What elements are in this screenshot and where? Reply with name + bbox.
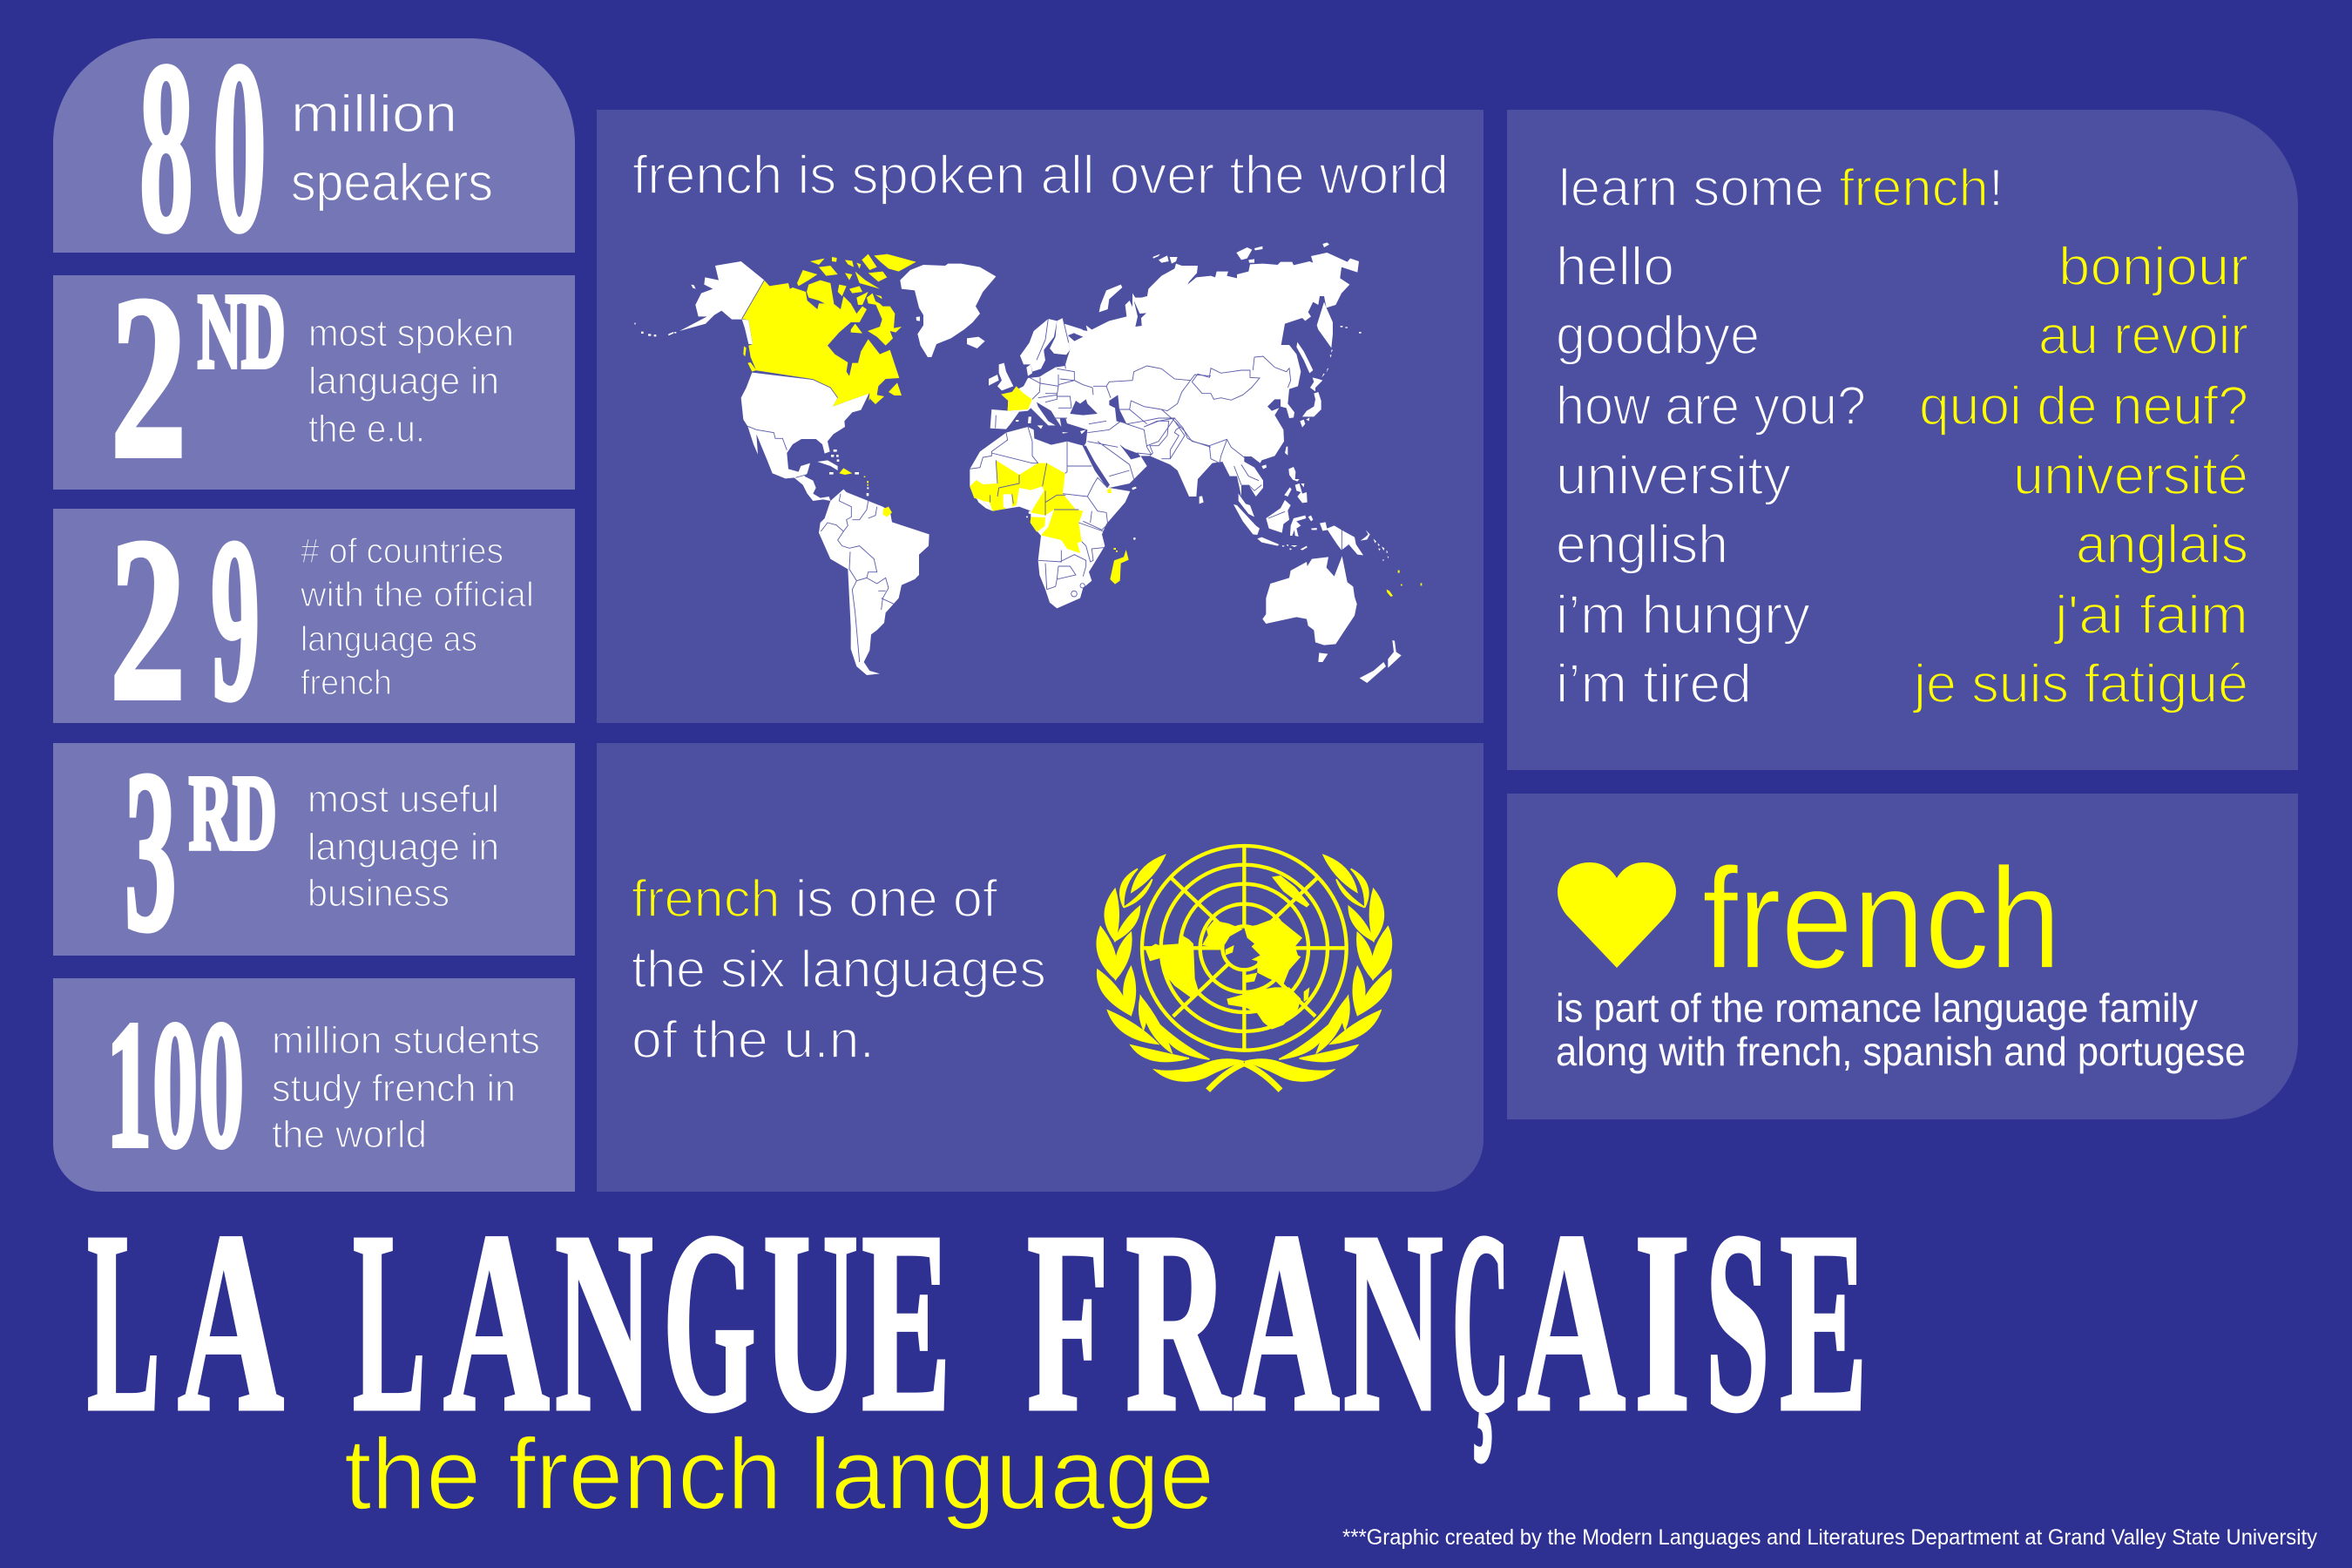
- title: la langue française: G: [663, 1179, 756, 1465]
- heading: learn some french: learn some french!: [1558, 159, 2004, 217]
- stat text: million students study french in the world: the world: [272, 1113, 427, 1156]
- stat number: 80: 80: [139, 11, 267, 282]
- phrase list: english: hello: [1556, 237, 1674, 297]
- phrase list: english: i’m tired: [1556, 654, 1752, 714]
- stat number: 29: [110, 490, 260, 748]
- panel: romance language: [1507, 794, 2298, 1119]
- map country borders: [742, 280, 1342, 662]
- stat text: most useful language in business: business: [308, 872, 449, 915]
- heading: french is spoken all over the world: french is spoken all over the world: [632, 145, 1449, 206]
- title: la langue française: L: [87, 1179, 160, 1465]
- title: la langue française: L: [353, 1179, 426, 1465]
- stat number: 3rd: RD: [189, 755, 276, 872]
- phrase list: english: [1556, 237, 1866, 714]
- icon: UN emblem: [1097, 846, 1391, 1091]
- phrase list: french: quoi de neuf?: [1919, 376, 2248, 436]
- title: la langue française: N: [555, 1179, 653, 1465]
- stat text: most useful language in business: language in: [308, 826, 499, 868]
- map land: asia east: [1132, 242, 1362, 497]
- phrase list: french: j'ai faim: [2053, 585, 2248, 645]
- title: la langue française: A: [1517, 1179, 1625, 1465]
- stat text: most spoken language in the e.u.: the e.u.: [308, 408, 425, 450]
- map inland seas: [1044, 301, 1146, 488]
- title: la langue française: N: [1343, 1179, 1443, 1465]
- title: la langue française: U: [763, 1179, 858, 1465]
- title: la langue française: S: [1706, 1179, 1769, 1465]
- title: la langue française: A: [1233, 1179, 1340, 1465]
- title: la langue française: A: [443, 1179, 550, 1465]
- text: french is one of the six languages of the u.n.: of the u.n.: [632, 1010, 875, 1069]
- phrase list: french: anglais: [2076, 515, 2248, 575]
- panel: 2nd most spoken: [53, 248, 575, 506]
- text: romance language family: [1556, 985, 2246, 1074]
- stat text: number of countries: with the official: [300, 576, 534, 614]
- stat number: 2nd: [111, 248, 285, 506]
- phrase list: french: bonjour: [2058, 237, 2248, 297]
- emblem continents: [1146, 875, 1309, 1030]
- emblem globe rings: [1142, 846, 1347, 1051]
- stat text: number of countries: language as: [301, 620, 477, 659]
- stat text: most useful language in business: [308, 778, 499, 915]
- stat text: million students study french in the world: million students: [272, 1019, 540, 1062]
- text: romance language family: is part of the romance language family: [1556, 985, 2198, 1031]
- stat number: 2nd: 2: [111, 248, 186, 506]
- text: romance language family: along with french, spanish and portugese: [1556, 1029, 2246, 1074]
- phrase list: english: i’m hungry: [1556, 585, 1810, 645]
- panel: 80 million speakers: [53, 11, 575, 282]
- stat text: number of countries: [300, 532, 534, 702]
- panel: 29 countries: [53, 509, 575, 723]
- title: la langue française: E: [1780, 1179, 1868, 1465]
- stat text: most spoken language in the e.u.: [308, 312, 514, 450]
- title: la langue française: Ç: [1452, 1179, 1510, 1465]
- world map: [634, 242, 1422, 683]
- phrase list: english: how are you?: [1556, 376, 1866, 436]
- stat text: number of countries: french: [301, 664, 392, 702]
- stat text: number of countries: # of countries: [301, 532, 504, 571]
- phrase list: french: au revoir: [2038, 306, 2248, 366]
- stat text: most spoken language in the e.u.: most spoken: [308, 312, 514, 355]
- text: french is one of the six languages of the u.n.: the six languages: [632, 940, 1046, 998]
- phrase list: english: goodbye: [1556, 306, 1760, 366]
- title: la langue française: A: [178, 1179, 284, 1465]
- stat text: most spoken language in the e.u.: language in: [308, 360, 499, 402]
- title: la langue française: I: [1634, 1179, 1691, 1465]
- emblem laurel: left branch: [1097, 855, 1244, 1091]
- phrase list: english: english: [1556, 515, 1728, 575]
- map highlight: west and central africa, madagascar: [970, 460, 1129, 585]
- stat text: most useful language in business: most useful: [308, 778, 499, 821]
- stat number: 29: 9: [211, 490, 260, 748]
- word: french: french: [1702, 838, 2061, 998]
- panel: 3rd most useful: [53, 724, 575, 979]
- map land: oceania: [1233, 467, 1402, 683]
- phrase list: french: [1912, 237, 2248, 714]
- emblem laurel: right branch: [1244, 855, 1391, 1091]
- footer credit: ***Graphic created by the Modern Languages and Literatures Department at Grand Valley State University: [1342, 1525, 2317, 1550]
- text: french is one of the six languages of the u.n.: [632, 869, 1046, 1069]
- phrase list: french: université: [2013, 446, 2248, 506]
- stat number: 3rd: 3: [125, 724, 177, 979]
- stat number: 2nd: ND: [198, 274, 285, 390]
- title: la langue française: E: [862, 1179, 951, 1465]
- map land: americas and greenland: [634, 261, 996, 675]
- title: la langue française: F: [1027, 1179, 1109, 1465]
- map land: europe, russia west, middle east: [989, 285, 1220, 504]
- phrase list: french: je suis fatigué: [1912, 654, 2248, 714]
- map land: africa: [970, 427, 1136, 608]
- map highlight: pacific territories: [1387, 571, 1422, 597]
- title: la langue française: R: [1125, 1179, 1230, 1465]
- stat text: million speakers: speakers: [291, 153, 493, 212]
- subtitle: the french language: [344, 1417, 1214, 1531]
- stat number: 100: 100: [106, 983, 244, 1186]
- stat number: 3rd: [125, 724, 276, 979]
- stat text: million students study french in the world: study french in: [272, 1067, 516, 1110]
- stat text: million speakers: [291, 84, 493, 212]
- stat text: million students study french in the world: [272, 1019, 540, 1156]
- icon: heart: [1558, 862, 1676, 968]
- map highlight: canada: [742, 254, 916, 517]
- panel: learn some french: [1507, 110, 2298, 770]
- panel: world map: [597, 110, 1484, 723]
- text: french is one of the six languages of the u.n.: french is one of: [632, 869, 997, 928]
- stat text: million speakers: million: [291, 84, 457, 143]
- stat number: 29: 2: [110, 490, 186, 748]
- panel: united nations: [597, 743, 1484, 1192]
- panel: 100 million students: [53, 978, 575, 1192]
- map highlight: france: [1001, 386, 1032, 411]
- phrase list: english: university: [1556, 446, 1791, 506]
